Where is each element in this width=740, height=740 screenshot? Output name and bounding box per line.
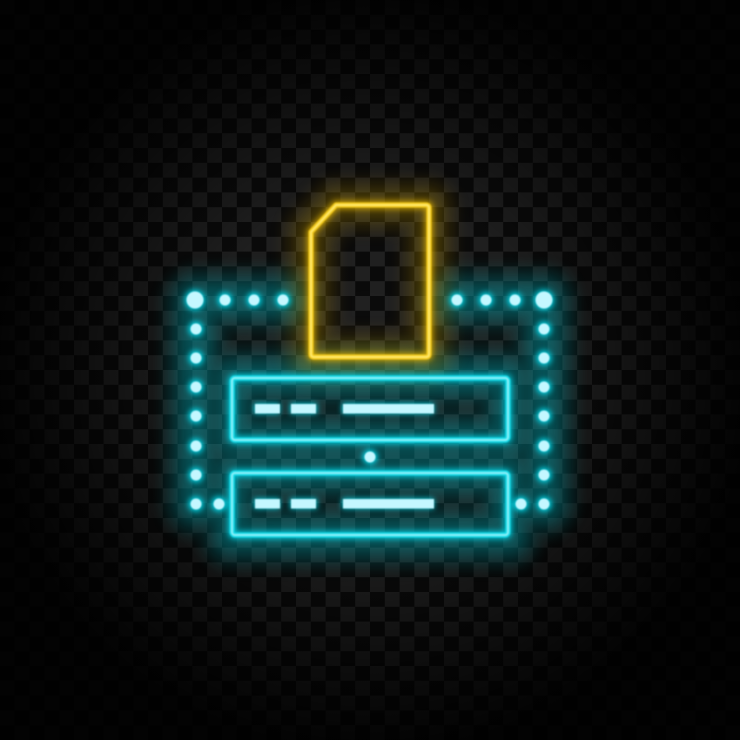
cyan wide glow <box>196 300 544 535</box>
dotted connector right <box>452 292 552 510</box>
server row top <box>232 378 508 440</box>
cyan near glow <box>185 290 554 535</box>
yellow near glow <box>311 205 429 357</box>
dotted connector left <box>186 292 288 510</box>
yellow wide glow <box>311 205 429 357</box>
server row bottom <box>232 473 508 535</box>
icon: document <box>311 205 429 357</box>
center dot <box>364 452 376 462</box>
